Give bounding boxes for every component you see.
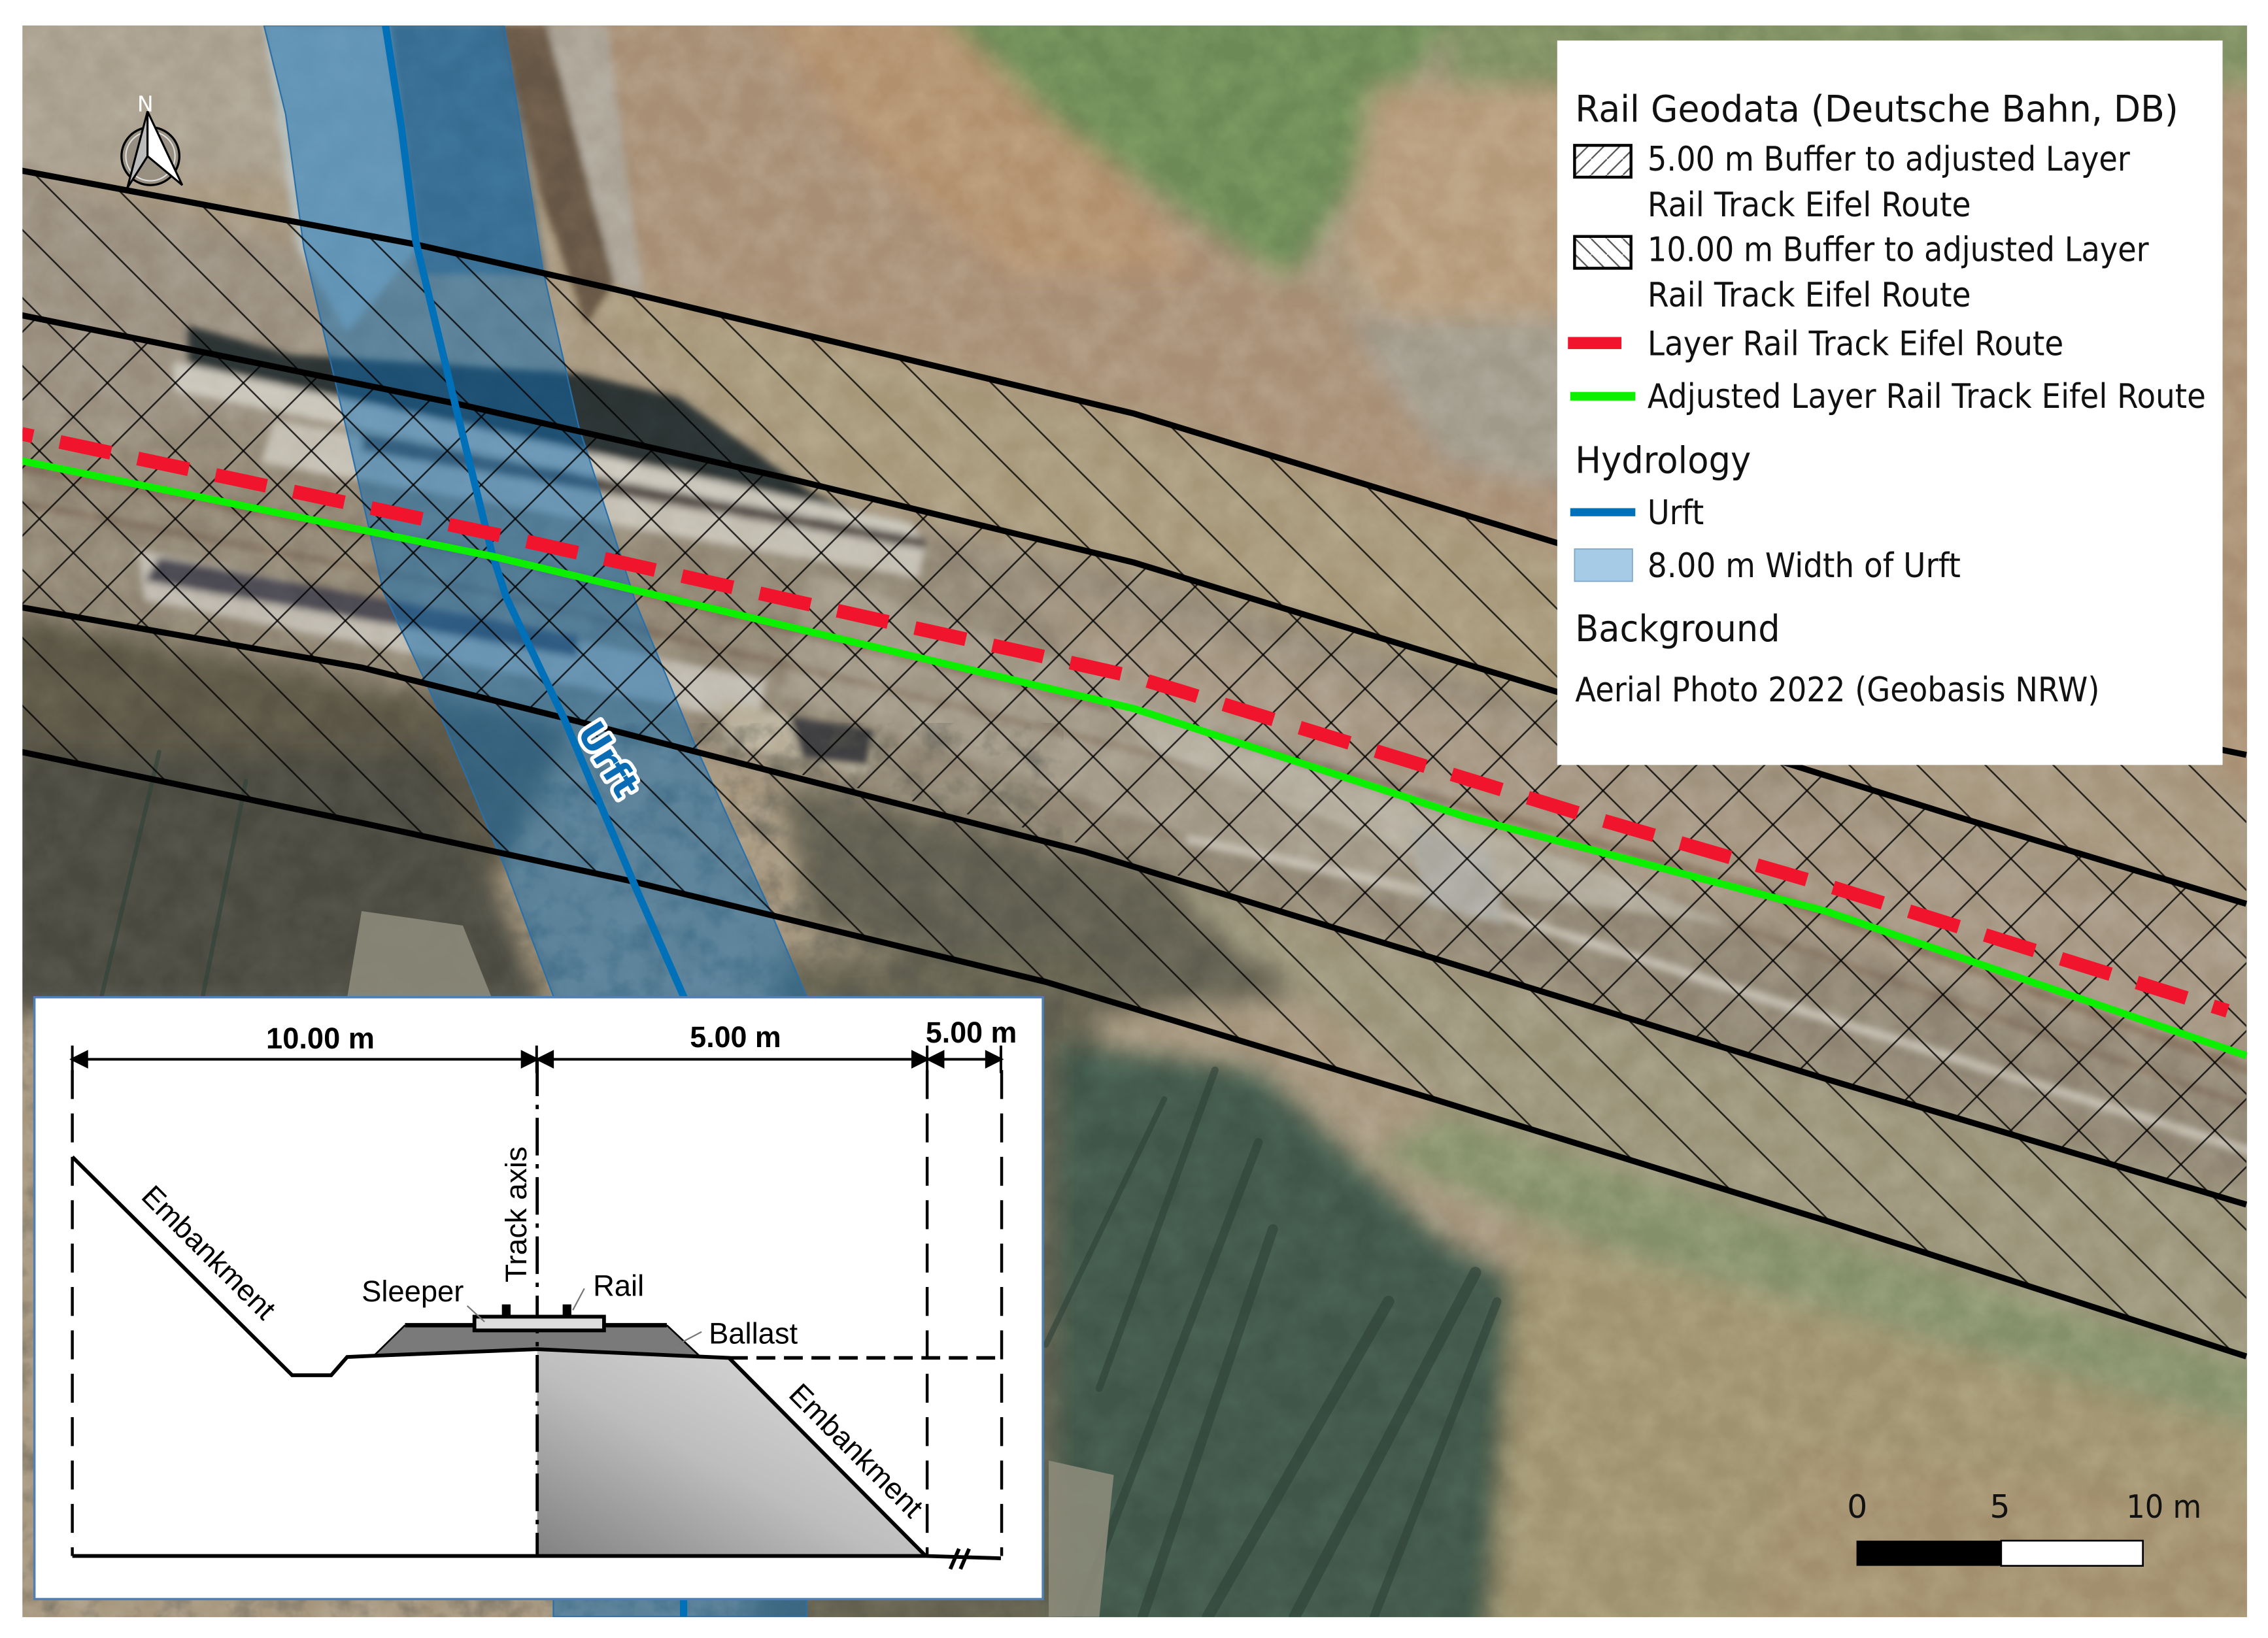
dimension: 5 m outer: 5.00 m bbox=[926, 1016, 1017, 1049]
label: sleeper: Sleeper bbox=[362, 1275, 464, 1308]
river bed under overlay bbox=[263, 25, 420, 333]
label: aerial photo source: Aerial Photo 2022 (Geobasis NRW) bbox=[1575, 671, 2099, 710]
label: Urft: Urft bbox=[1648, 493, 1704, 533]
leader lines bbox=[467, 1288, 702, 1345]
Urft river label: Urft bbox=[569, 714, 647, 805]
north arrow: N bbox=[137, 91, 154, 116]
service path bbox=[1186, 839, 2268, 1157]
swatch: 10 m buffer bbox=[1574, 237, 1631, 268]
ballast bed bbox=[781, 571, 1504, 926]
5 m buffer outlines bbox=[22, 315, 2246, 1205]
sleeper bbox=[475, 1316, 604, 1330]
legend panel bbox=[1557, 41, 2223, 765]
swatch: red rail line bbox=[1568, 337, 1621, 349]
base line bbox=[73, 1548, 1001, 1569]
label: river width: 8.00 m Width of Urft bbox=[1648, 546, 1961, 586]
10 m buffer outlines bbox=[22, 171, 2246, 1356]
swatch: 5 m buffer bbox=[1574, 145, 1631, 177]
label: 10 m buffer: Rail Track Eifel Route bbox=[1648, 276, 1971, 315]
label: embankment right: Embankment bbox=[783, 1377, 930, 1524]
10 m buffer hatching bbox=[22, 171, 2246, 1356]
label: rail track: Layer Rail Track Eifel Route bbox=[1648, 324, 2063, 363]
embankment gradient fill bbox=[537, 1349, 926, 1556]
bridge deck strips bbox=[173, 361, 926, 544]
scale bar: 0 bbox=[1847, 1489, 1867, 1526]
adjusted rail track (green) bbox=[22, 461, 2246, 1056]
5 m buffer hatching bbox=[22, 315, 2246, 1205]
north arrow bbox=[122, 91, 182, 188]
dashed limits bbox=[73, 1070, 1002, 1556]
Urft centre line bbox=[386, 25, 684, 1616]
ballast bbox=[375, 1325, 700, 1356]
swatch: river width bbox=[1574, 549, 1633, 581]
legend heading: hydrology: Hydrology bbox=[1575, 439, 1751, 482]
label: rail: Rail bbox=[593, 1269, 644, 1302]
dimension: 10 m: 10.00 m bbox=[266, 1022, 375, 1055]
Urft 8 m width polygon bbox=[264, 25, 807, 1616]
scale bar bbox=[1847, 1489, 2201, 1566]
scale bar: 5 bbox=[1990, 1489, 2010, 1526]
legend heading: background: Background bbox=[1575, 608, 1780, 650]
label: 5 m buffer: Rail Track Eifel Route bbox=[1648, 186, 1971, 225]
scale bar: 10 m bbox=[2126, 1489, 2201, 1526]
bridge shadow bbox=[188, 326, 926, 543]
rock and puddle patches bbox=[347, 911, 1114, 1616]
ground profile bbox=[73, 1157, 926, 1556]
label: 5 m buffer: 5.00 m Buffer to adjusted Layer bbox=[1648, 140, 2130, 179]
label: ballast: Ballast bbox=[709, 1316, 798, 1350]
dimension: 5 m: 5.00 m bbox=[690, 1020, 781, 1054]
inset: track cross-section bbox=[35, 997, 1043, 1599]
track axis line bbox=[537, 1058, 538, 1556]
dimension arrows bbox=[73, 1046, 1001, 1073]
label: adjusted rail track: Adjusted Layer Rail Track Eifel Route bbox=[1648, 377, 2206, 416]
label: embankment left: Embankment bbox=[135, 1179, 282, 1326]
label: 10 m buffer: 10.00 m Buffer to adjusted Layer bbox=[1648, 231, 2149, 270]
tree shadows bbox=[101, 752, 1497, 1616]
swatch: green line bbox=[1570, 392, 1635, 401]
label: track axis: Track axis bbox=[499, 1146, 533, 1282]
original rail track (red dashed) bbox=[22, 434, 2227, 1011]
legend heading: rail geodata: Rail Geodata (Deutsche Bahn, DB) bbox=[1575, 88, 2178, 131]
rails bbox=[502, 1305, 571, 1316]
swatch: Urft line bbox=[1570, 508, 1635, 516]
